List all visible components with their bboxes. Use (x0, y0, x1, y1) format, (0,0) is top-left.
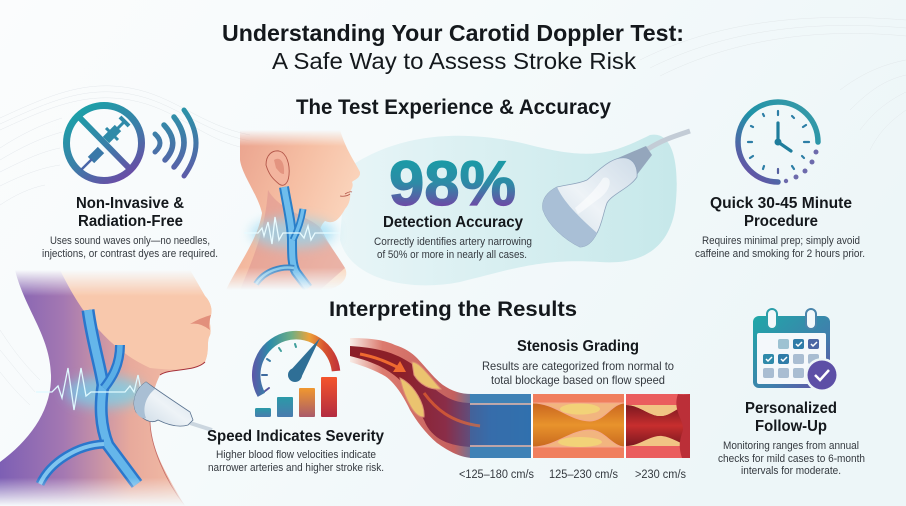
heading: interpreting the results: Interpreting the Results (329, 298, 577, 321)
panel: non-invasive (42, 106, 218, 260)
probe (134, 382, 212, 430)
carotid artery (256, 187, 308, 288)
illustration: head and neck, top (226, 130, 360, 290)
neck and face (0, 270, 212, 506)
heading: Detection Accuracy (383, 214, 523, 231)
lips (340, 192, 352, 196)
title: Understanding Your Carotid Doppler Test: (222, 20, 684, 46)
description (695, 235, 865, 260)
icon: speedometer (255, 335, 337, 417)
description: Requires minimal prep; simply avoid (702, 235, 860, 247)
artery curved section (350, 338, 472, 458)
face and neck (226, 130, 360, 290)
icon: sound waves (155, 110, 196, 176)
blob background (340, 135, 677, 285)
description: Results are categorized from normal to (482, 359, 674, 373)
carotid artery (40, 310, 137, 484)
icon: clock (738, 102, 818, 183)
icon: ultrasound probe (543, 131, 690, 247)
description: Monitoring ranges from annual (723, 440, 859, 452)
needle (290, 338, 320, 378)
icon: calendar (753, 309, 839, 392)
heading: Personalized (745, 400, 837, 417)
description: narrower arteries and higher stroke risk. (208, 462, 384, 474)
velocity labels: <125–180 cm/s (459, 469, 534, 481)
face highlight (60, 270, 212, 370)
panel: speed indicates severity (207, 335, 384, 474)
panel: personalized follow-up (718, 309, 865, 477)
plaque curved (412, 362, 441, 389)
description: checks for mild cases to 6-month (718, 453, 865, 465)
description: total blockage based on flow speed (491, 373, 665, 387)
glow (251, 218, 335, 248)
description (482, 359, 674, 387)
heading (710, 195, 852, 230)
title (222, 20, 684, 74)
description (718, 440, 865, 477)
jaw outline (160, 362, 205, 375)
description: caffeine and smoking for 2 hours prior. (695, 248, 865, 260)
stat: 98%: 98% (389, 149, 516, 219)
moderate segment (532, 394, 625, 458)
panel: detection accuracy (374, 149, 532, 261)
heading: Speed Indicates Severity (207, 428, 384, 445)
description (208, 449, 384, 474)
description: Uses sound waves only—no needles, (50, 235, 210, 247)
illustration: neck with probe, bottom left (0, 270, 212, 506)
lips (190, 315, 211, 330)
flow arrows (360, 354, 397, 367)
velocity labels (459, 469, 686, 481)
description: of 50% or more in nearly all cases. (377, 249, 527, 261)
description: Correctly identifies artery narrowing (374, 236, 532, 248)
velocity labels: 125–230 cm/s (549, 469, 618, 481)
heading: Stenosis Grading (517, 338, 639, 355)
divider (531, 394, 533, 458)
panel: quick procedure (695, 102, 865, 260)
heading: Procedure (744, 213, 818, 230)
glow (65, 376, 145, 408)
description (374, 236, 532, 261)
heading: Radiation-Free (78, 213, 183, 230)
description: intervals for moderate. (741, 465, 841, 477)
bars (255, 408, 271, 417)
severe segment (625, 394, 690, 458)
description: Higher blood flow velocities indicate (216, 449, 376, 461)
neck shading (240, 190, 345, 290)
pulse wave (36, 368, 142, 410)
heading (76, 195, 184, 230)
title: A Safe Way to Assess Stroke Risk (272, 48, 637, 74)
pulse wave (244, 217, 340, 244)
heading (745, 400, 837, 435)
heading: Non-Invasive & (76, 195, 184, 212)
icon: crossed-out syringe (66, 106, 142, 180)
description: injections, or contrast dyes are required. (42, 248, 218, 260)
heading: Quick 30-45 Minute (710, 195, 852, 212)
chart: stenosis artery (350, 338, 690, 481)
velocity labels: >230 cm/s (635, 469, 686, 481)
decorative wave lines (0, 17, 906, 405)
heading: Follow-Up (755, 418, 827, 435)
divider (624, 394, 626, 458)
ear (266, 151, 289, 185)
heading: test experience: The Test Experience & Accuracy (296, 96, 611, 119)
description (42, 235, 218, 260)
